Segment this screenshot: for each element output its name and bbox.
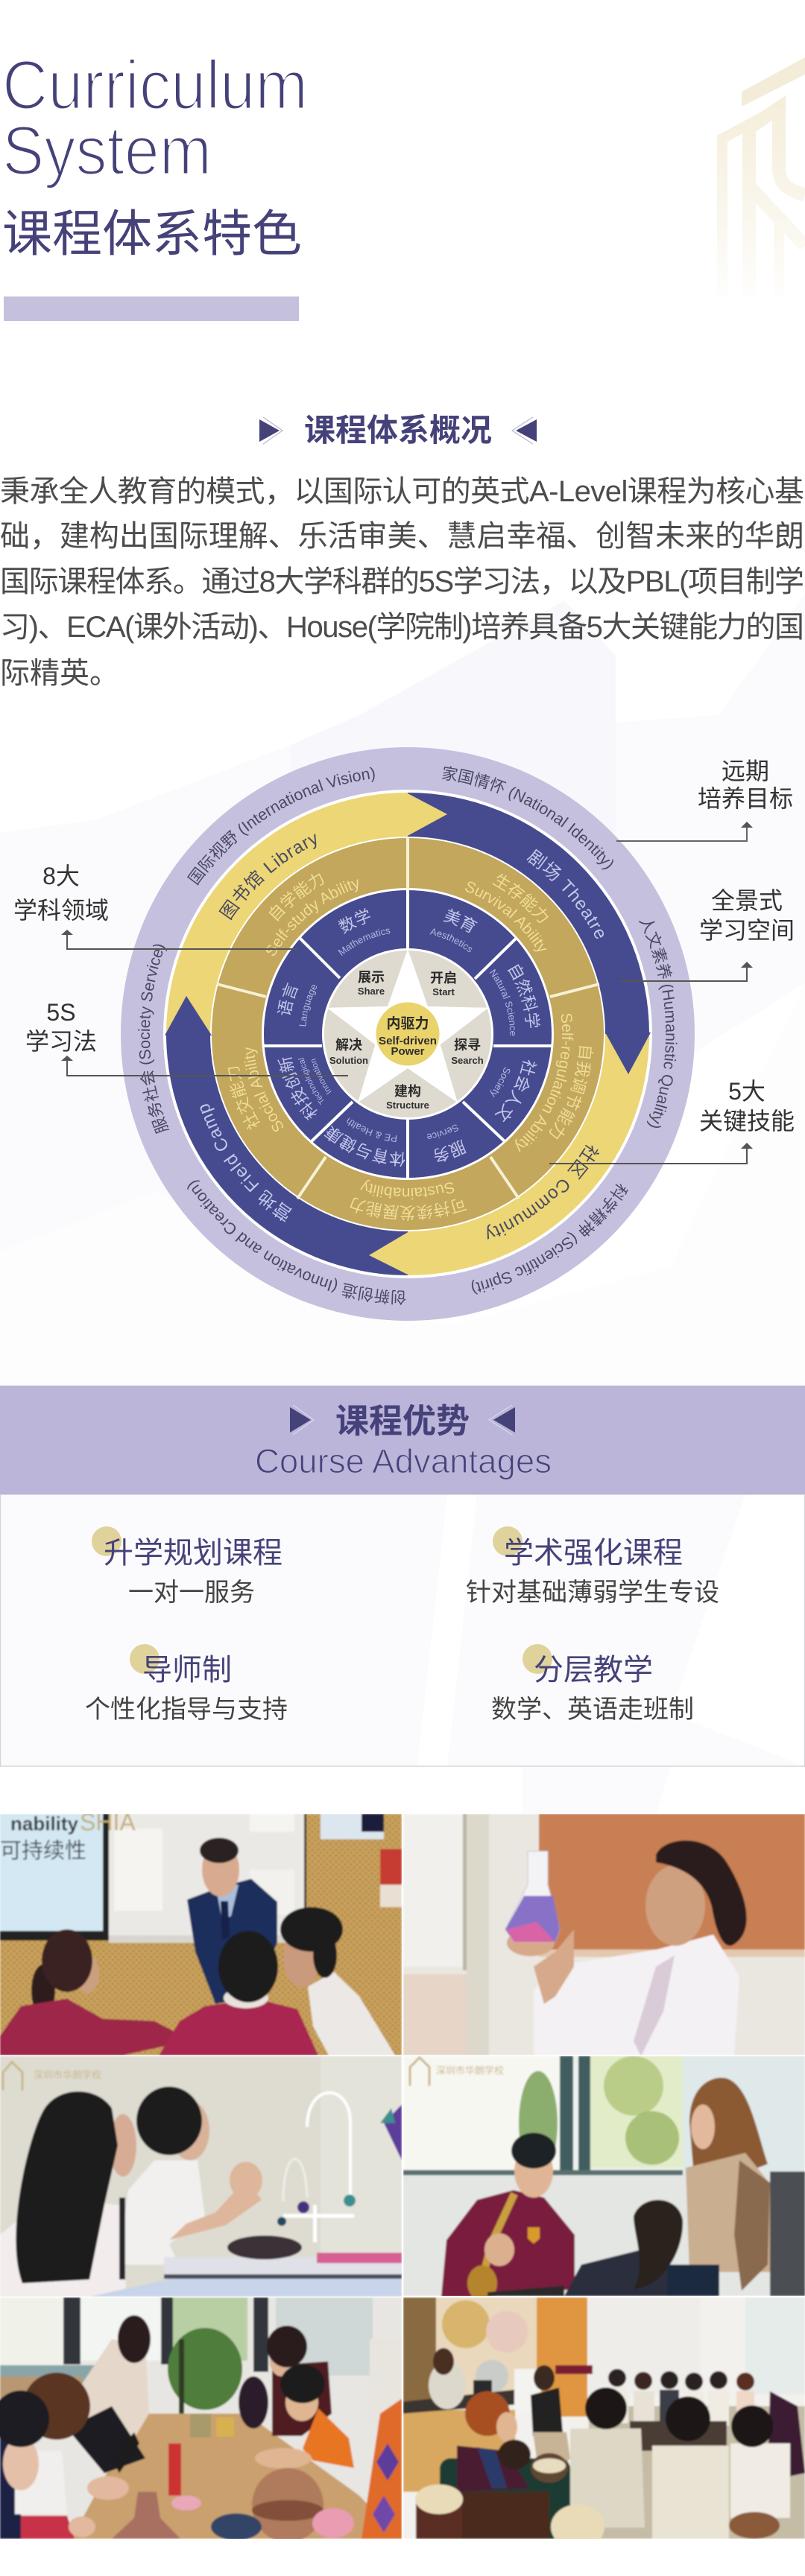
gold ring labels: Sustainability bbox=[360, 1180, 455, 1199]
navy ring labels: 语言 bbox=[277, 983, 298, 1015]
navy ring labels: Innovation bbox=[312, 1059, 332, 1095]
hub labels: Search bbox=[451, 1055, 484, 1066]
photo: teacher with students in classroom bbox=[0, 1809, 402, 2055]
arrow ring labels: 营地 Field Camp bbox=[200, 1104, 292, 1222]
text block: overview paragraph: 秉承全人教育的模式，以国际认可的英式A-Level课程为核心基 bbox=[0, 475, 804, 508]
advantage: 导师制: 个性化指导与支持 bbox=[85, 1695, 288, 1724]
panel: course advantages bbox=[0, 1386, 805, 1766]
hub labels: 展示 bbox=[358, 970, 385, 985]
callout: 8大学科领域: 8大 bbox=[42, 863, 80, 889]
hub labels: Power bbox=[391, 1045, 425, 1058]
ring: long-term goals bbox=[121, 747, 695, 1321]
text block: overview paragraph bbox=[0, 475, 804, 690]
arrow ring labels: 图书馆 Library bbox=[219, 834, 316, 921]
callout: 5S学习法: 学习法 bbox=[25, 1028, 97, 1055]
advantage: 学术强化课程: 针对基础薄弱学生专设 bbox=[466, 1579, 719, 1607]
outer ring labels: 创新创造 (Innovation and Creation) bbox=[187, 1180, 405, 1305]
photo: science teacher holding flask bbox=[403, 1814, 805, 2056]
text block: overview paragraph: 习)、ECA(课外活动)、House(学院制)培养具备5大关键能力的国 bbox=[0, 611, 804, 644]
advantage: 分层教学: 数学、英语走班制 bbox=[491, 1695, 694, 1724]
heading: 课程体系概况 bbox=[259, 413, 537, 448]
outer ring labels: 科学精神 (Scientific Spirit) bbox=[471, 1184, 628, 1295]
navy ring labels bbox=[277, 908, 540, 1167]
callout: 远期培养目标: 培养目标 bbox=[698, 785, 793, 812]
gold ring labels: 自学能力 bbox=[268, 873, 323, 921]
ring: learning spaces bbox=[165, 793, 651, 1275]
navy ring labels: Natural Science bbox=[489, 969, 515, 1035]
navy ring labels: 自然科学 bbox=[507, 964, 540, 1028]
hub labels: 解决 bbox=[335, 1038, 362, 1053]
title: Curriculum System bbox=[2, 46, 308, 189]
outer ring labels: 人文素养 (Humanistic Quality) bbox=[639, 921, 677, 1128]
outer ring labels bbox=[138, 766, 677, 1305]
navy ring labels: 科技创新 bbox=[277, 1057, 318, 1120]
callout: 5大关键技能 bbox=[549, 1078, 795, 1164]
gold ring labels: Social Ability bbox=[244, 1047, 283, 1132]
hub: 5S star bbox=[324, 949, 491, 1117]
hub labels: Self-driven bbox=[379, 1035, 437, 1047]
callout: 5S学习法 bbox=[25, 999, 348, 1076]
navy ring labels: PE & Health bbox=[347, 1117, 397, 1143]
ring: eight subject areas bbox=[263, 889, 552, 1178]
navy ring labels: Language bbox=[300, 985, 317, 1027]
hub labels: 内驱力 bbox=[386, 1015, 429, 1032]
gold ring labels: Self-regulation Ability bbox=[515, 1013, 574, 1152]
callout: 8大学科领域 bbox=[13, 863, 298, 949]
photo: student playing saxophone bbox=[403, 2056, 805, 2301]
outer ring labels: 家国情怀 (National Identity) bbox=[442, 766, 613, 870]
advantage: 升学规划课程 bbox=[92, 1526, 282, 1607]
photo: students doing handicrafts bbox=[0, 2297, 402, 2542]
arrow ring labels bbox=[200, 834, 604, 1240]
advantage: 分层教学 bbox=[491, 1644, 694, 1724]
advantage: 升学规划课程: 一对一服务 bbox=[128, 1579, 255, 1607]
arrow ring labels: 剧场 Theatre bbox=[526, 849, 604, 939]
callout: 全景式学习空间 bbox=[620, 887, 795, 981]
navy ring labels: 社会人文 bbox=[495, 1059, 537, 1122]
advantage: 学术强化课程: 学术强化课程 bbox=[504, 1537, 683, 1570]
hub labels: 建构 bbox=[394, 1084, 421, 1099]
navy ring labels: 服务 bbox=[434, 1140, 467, 1162]
title: Curriculum System: System bbox=[2, 112, 212, 189]
photo: drum circle in music room bbox=[403, 2297, 805, 2549]
hub labels: Solution bbox=[329, 1055, 368, 1066]
photo: teacher with students in classroom: SHIA bbox=[80, 1809, 136, 1836]
text block: overview paragraph: 础，建构出国际理解、乐活审美、慧启幸福、创智未来的华朗 bbox=[0, 520, 804, 553]
photo: students in science lab bbox=[0, 2056, 402, 2297]
advantage: 导师制: 导师制 bbox=[142, 1654, 232, 1687]
hub labels: Start bbox=[432, 986, 455, 997]
photo: teacher with students in classroom: 可持续性 bbox=[0, 1839, 86, 1863]
navy ring labels: 数学 bbox=[338, 908, 370, 934]
title accent bar bbox=[4, 296, 299, 321]
callout: 远期培养目标: 远期 bbox=[722, 758, 769, 784]
text block: overview paragraph: 际精英。 bbox=[0, 657, 119, 690]
callout: 5大关键技能: 5大 bbox=[728, 1078, 765, 1105]
gold ring labels: 社交能力 bbox=[226, 1067, 260, 1130]
outer ring labels: 服务社会 (Society Service) bbox=[138, 945, 169, 1134]
gold ring labels: 生存能力 bbox=[492, 873, 549, 923]
photo: teacher with students in classroom: nability bbox=[10, 1812, 79, 1835]
subtitle: 课程体系特色 bbox=[2, 206, 302, 262]
navy ring labels: 体育与健康 bbox=[323, 1125, 405, 1167]
heading: Course Advantages: Course Advantages bbox=[255, 1442, 552, 1480]
chart: concentric curriculum wheel bbox=[121, 747, 695, 1321]
heading: 课程优势: 课程优势 bbox=[335, 1402, 470, 1440]
gold ring labels: Self-study Ability bbox=[265, 879, 358, 957]
navy ring labels: Society bbox=[490, 1067, 510, 1098]
photo: student playing saxophone: 深圳市华朗学校 bbox=[436, 2065, 504, 2076]
navy ring labels: Service bbox=[426, 1125, 458, 1139]
gold ring labels: 自我调节能力 bbox=[549, 1046, 593, 1140]
callout: 5大关键技能: 关键技能 bbox=[699, 1108, 795, 1135]
text block: overview paragraph: 国际课程体系。通过8大学科群的5S学习法，以及PBL(项目制学 bbox=[0, 565, 804, 598]
icon: faded school logo mark bbox=[722, 57, 805, 298]
heading: 课程优势 bbox=[290, 1402, 515, 1440]
advantage: 导师制 bbox=[85, 1644, 288, 1724]
gold ring labels: Survival Ability bbox=[465, 881, 547, 952]
hub labels: Structure bbox=[386, 1100, 429, 1111]
panel frame bbox=[0, 1494, 805, 1766]
photo: students in science lab: 深圳市华朗学校 bbox=[34, 2069, 101, 2081]
heading band bbox=[0, 1386, 805, 1494]
outer ring labels: 国际视野 (International Vision) bbox=[187, 767, 375, 885]
gold ring labels bbox=[226, 873, 593, 1221]
advantage: 分层教学: 分层教学 bbox=[534, 1654, 653, 1687]
navy ring labels: Technological bbox=[298, 1058, 323, 1105]
callout: 5S学习法: 5S bbox=[46, 999, 76, 1026]
gold ring labels: 可持续发展能力 bbox=[350, 1198, 467, 1221]
callout: 全景式学习空间: 学习空间 bbox=[699, 917, 795, 944]
callout: 全景式学习空间: 全景式 bbox=[711, 887, 783, 914]
callout: 8大学科领域: 学科领域 bbox=[13, 897, 109, 924]
navy ring labels: Aesthetics bbox=[429, 928, 473, 952]
navy ring labels: Mathematics bbox=[338, 928, 391, 956]
callout: 远期培养目标 bbox=[616, 758, 793, 841]
hub labels: 开启 bbox=[430, 971, 457, 986]
hub labels: 探寻 bbox=[454, 1038, 481, 1053]
ring: key skills bbox=[217, 837, 599, 1205]
hub labels bbox=[329, 970, 484, 1111]
title: Curriculum System: Curriculum bbox=[2, 46, 308, 124]
navy ring labels: 美育 bbox=[443, 909, 478, 933]
arrow ring labels: 社区 Community bbox=[487, 1144, 599, 1240]
advantage: 升学规划课程: 升学规划课程 bbox=[104, 1537, 282, 1570]
heading: 课程体系概况: 课程体系概况 bbox=[304, 413, 492, 448]
hub labels: Share bbox=[358, 986, 385, 997]
advantage: 学术强化课程 bbox=[466, 1526, 719, 1607]
